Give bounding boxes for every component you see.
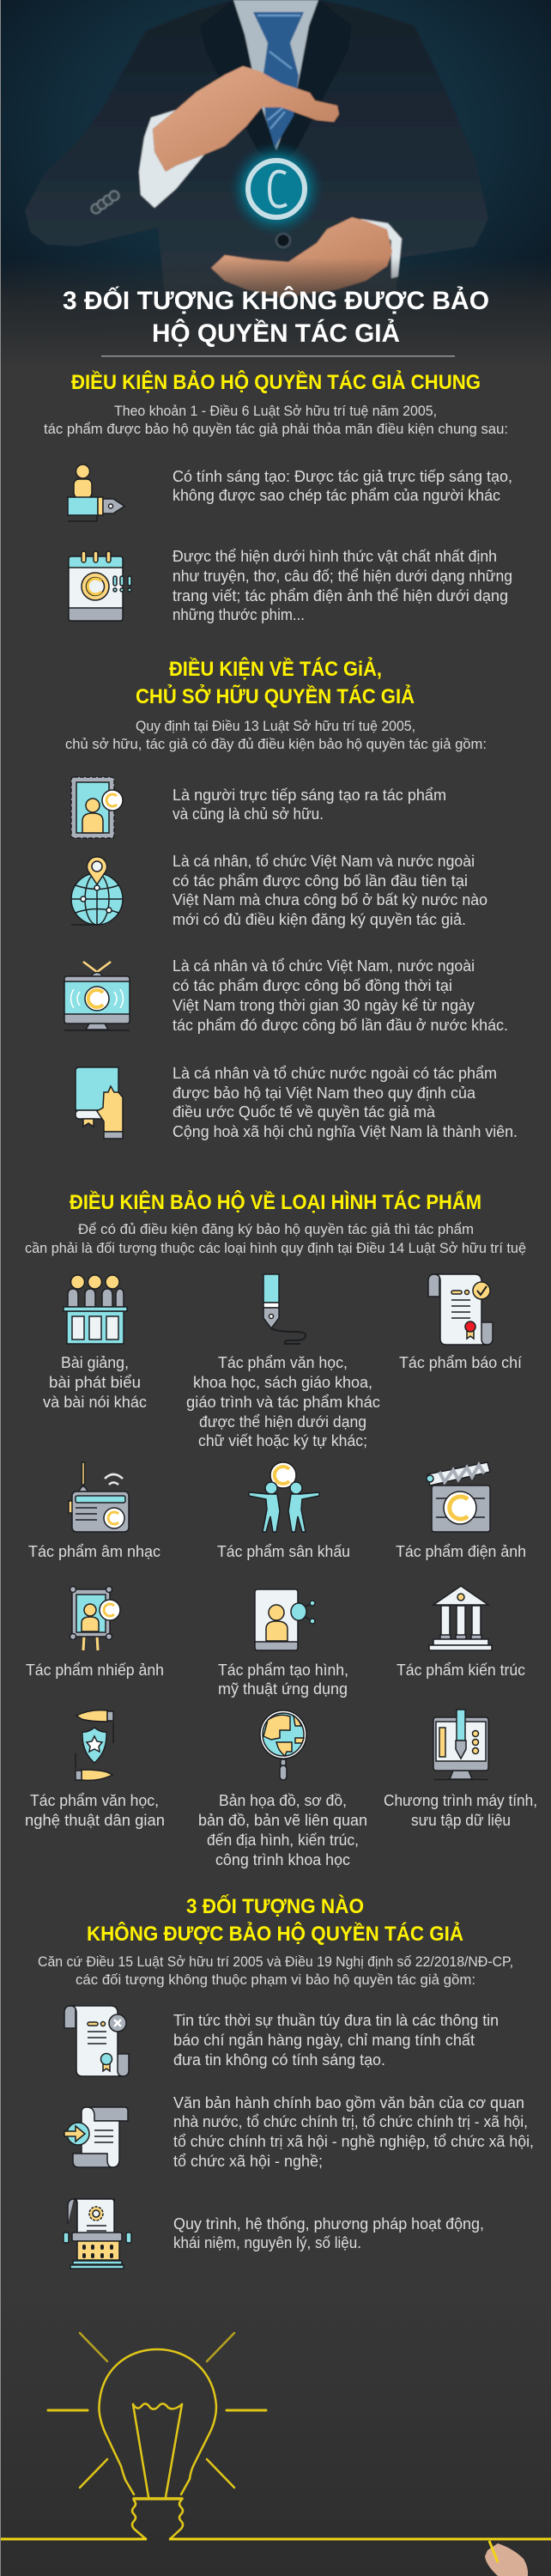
icon: magnifier with map <box>260 1710 306 1780</box>
title: HỘ QUYỀN TÁC GIẢ <box>152 319 400 348</box>
icon: typewriter with gear <box>64 2199 131 2269</box>
text: Vietnamese and foreign individuals first publication: có tác phẩm được công bố lần đầu tiên tại <box>173 872 468 890</box>
caption: computer programs <box>384 1792 537 1829</box>
caption: lectures <box>43 1354 147 1411</box>
text: international treaty: Là cá nhân và tổ chức nước ngoài có tác phẩm <box>173 1065 497 1082</box>
hand holding chalk <box>485 2541 528 2576</box>
caption: lectures: bài phát biểu <box>49 1374 141 1391</box>
heading: author conditions: ĐIỀU KIỆN VỀ TÁC GiẢ, <box>169 656 382 681</box>
caption: film works: Tác phẩm điện ảnh <box>396 1543 526 1560</box>
caption: literary and scientific works <box>186 1354 380 1449</box>
heading: author conditions <box>136 656 415 708</box>
heading: unprotected subjects <box>87 1894 463 1946</box>
text: physical form condition: Được thể hiện dưới hình thức vật chất nhất định <box>173 548 497 565</box>
caption: press works: Tác phẩm báo chí <box>399 1354 522 1371</box>
left edge strip <box>0 0 1 2576</box>
text: processes and concepts <box>173 2215 484 2251</box>
icon: scroll with arrow <box>64 2107 128 2167</box>
icon: press certificate <box>428 1274 493 1345</box>
text: physical form condition: những thước phim... <box>173 606 305 623</box>
caption: folk art <box>25 1792 165 1829</box>
text: creativity condition: Có tính sáng tạo: Được tác giả trực tiếp sáng tạo, <box>173 468 512 485</box>
text: simultaneous publication: Là cá nhân và tổ chức Việt Nam, nước ngoài <box>173 957 475 975</box>
intro text: unprotected subjects: các đối tượng không thuộc phạm vi bảo hộ quyền tác giả gồm: <box>76 1972 475 1988</box>
caption: literary and scientific works: Tác phẩm văn học, <box>218 1354 348 1371</box>
heading: author conditions: CHỦ SỞ HỮU QUYỀN TÁC GIẢ <box>136 683 415 708</box>
icon: photo on easel <box>70 1587 120 1650</box>
text: Vietnamese and foreign individuals first publication: Việt Nam mà chưa công bố ở bất kỳ nước nào <box>173 891 487 908</box>
hero photo: businessman protecting copyright symbol <box>0 0 551 369</box>
text: international treaty: được bảo hộ tại Việt Nam theo quy định của <box>173 1084 476 1102</box>
text: pure news: Tin tức thời sự thuần túy đưa tin là các thông tin <box>173 2012 499 2029</box>
text: administrative documents: tổ chức chính trị xã hội - nghề nghiệp, tổ chức xã hội, <box>173 2133 534 2150</box>
text: physical form condition: như truyện, thơ, câu đố; thể hiện dưới dạng những <box>173 568 512 585</box>
text: simultaneous publication <box>173 957 508 1034</box>
icon: hands protecting shield <box>76 1710 113 1780</box>
text: international treaty: điều ước Quốc tế về quyền tác giả mà <box>173 1103 436 1121</box>
icon: phone with person <box>255 1589 315 1650</box>
text: simultaneous publication: tác phẩm đó được công bố lần đầu ở nước khác. <box>173 1017 508 1034</box>
intro text: types of works: cần phải là đối tượng thuộc các loại hình quy định tại Điều 14 Luật Sở hữu trí tuệ <box>25 1241 526 1256</box>
text: pure news: đưa tin không có tính sáng tạo. <box>173 2051 385 2069</box>
icon: news document with x badge <box>64 2006 129 2076</box>
icon: fountain pen <box>263 1274 306 1344</box>
title <box>63 286 489 348</box>
heading: types of works: ĐIỀU KIỆN BẢO HỘ VỀ LOẠI HÌNH TÁC PHẨM <box>70 1189 481 1214</box>
caption: folk art: Tác phẩm văn học, <box>30 1792 159 1809</box>
chalk ground line <box>1 2538 551 2540</box>
intro text: general conditions: Theo khoản 1 - Điều 6 Luật Sở hữu trí tuệ năm 2005, <box>114 404 437 419</box>
text: simultaneous publication: Việt Nam trong thời gian 30 ngày kể từ ngày <box>173 997 475 1014</box>
text: direct creator: và cũng là chủ sở hữu. <box>173 805 324 823</box>
text: creativity condition <box>173 468 512 504</box>
caption: literary and scientific works: giáo trình và tác phẩm khác <box>186 1394 380 1411</box>
text: international treaty: Cộng hoà xã hội chủ nghĩa Việt Nam là thành viên. <box>173 1123 518 1140</box>
heading: general conditions: ĐIỀU KIỆN BẢO HỘ QUYỀN TÁC GIẢ CHUNG <box>71 369 481 394</box>
icon: classical building <box>429 1586 492 1650</box>
intro text: author conditions: Quy định tại Điều 13 Luật Sở hữu trí tuệ 2005, <box>136 719 415 734</box>
icon: notepad with copyright <box>69 551 131 621</box>
caption: architecture: Tác phẩm kiến trúc <box>397 1662 525 1679</box>
intro text: author conditions <box>65 719 487 752</box>
icon: globe with pin <box>71 857 123 925</box>
icon: film clapperboard <box>427 1462 490 1532</box>
icon: lecture podium <box>64 1275 127 1344</box>
caption: lectures: Bài giảng, <box>61 1354 129 1371</box>
text: physical form condition <box>173 548 512 623</box>
caption: folk art: nghệ thuật dân gian <box>25 1812 165 1829</box>
caption: computer programs: Chương trình máy tính, <box>384 1792 537 1809</box>
text: direct creator <box>173 787 446 823</box>
text: pure news: báo chí ngắn hàng ngày, chỉ mang tính chất <box>173 2031 475 2049</box>
text: simultaneous publication: có tác phẩm được công bố đồng thời tại <box>173 977 452 994</box>
caption: lectures: và bài nói khác <box>43 1394 147 1411</box>
intro text: unprotected subjects <box>38 1954 513 1988</box>
icon: person with pen <box>68 465 124 521</box>
icon: stamp with person <box>71 777 123 838</box>
caption: literary and scientific works: được thể hiện dưới dạng <box>199 1413 366 1431</box>
intro text: unprotected subjects: Căn cứ Điều 15 Luật Sở hữu trí 2005 và Điều 19 Nghị định số 22/2018/NĐ-CP, <box>38 1954 513 1970</box>
caption: stage works: Tác phẩm sân khấu <box>217 1543 350 1560</box>
text: creativity condition: không được sao chép tác phẩm của người khác <box>173 487 500 504</box>
caption: fine and applied art: Tác phẩm tạo hình, <box>218 1662 348 1679</box>
caption: computer programs: sưu tập dữ liệu <box>411 1812 511 1829</box>
caption: fine and applied art <box>218 1662 348 1698</box>
caption: photography works: Tác phẩm nhiếp ảnh <box>26 1662 164 1679</box>
caption: maps and drawings: công trình khoa học <box>215 1851 350 1868</box>
text: pure news <box>173 2012 499 2069</box>
text: Vietnamese and foreign individuals first publication: mới có đủ điều kiện đăng ký quyền tác giả. <box>173 911 466 928</box>
intro text: author conditions: chủ sở hữu, tác giả có đầy đủ điều kiện bảo hộ quyền tác giả gồm: <box>65 737 487 752</box>
text: international treaty <box>173 1065 518 1140</box>
heading: unprotected subjects: 3 ĐỐI TƯỢNG NÀO <box>186 1894 364 1918</box>
caption: maps and drawings <box>198 1792 367 1868</box>
intro text: general conditions: tác phẩm được bảo hộ quyền tác giả phải thỏa mãn điều kiện chung sau: <box>44 422 508 437</box>
icon: radio <box>69 1462 129 1532</box>
text: direct creator: Là người trực tiếp sáng tạo ra tác phẩm <box>173 787 446 804</box>
caption: literary and scientific works: chữ viết hoặc ký tự khác; <box>198 1432 367 1449</box>
intro text: types of works: Để có đủ điều kiện đăng ký bảo hộ quyền tác giả thì tác phẩm <box>78 1222 474 1237</box>
text: processes and concepts: khái niệm, nguyên lý, số liệu. <box>173 2234 361 2251</box>
text: physical form condition: trang viết; tác phẩm điện ảnh thể hiện dưới dạng <box>173 587 508 605</box>
caption: music works: Tác phẩm âm nhạc <box>28 1543 160 1560</box>
chalkboard background <box>1 2284 551 2576</box>
icon: stage performers <box>249 1462 319 1532</box>
text: administrative documents: tổ chức xã hội - nghề; <box>173 2153 323 2170</box>
caption: maps and drawings: Bản họa đồ, sơ đồ, <box>219 1792 347 1809</box>
intro text: types of works <box>25 1222 526 1256</box>
caption: literary and scientific works: khoa học, sách giáo khoa, <box>193 1374 372 1391</box>
intro text: general conditions <box>44 404 508 437</box>
text: processes and concepts: Quy trình, hệ thống, phương pháp hoạt động, <box>173 2215 484 2233</box>
title: 3 ĐỐI TƯỢNG KHÔNG ĐƯỢC BẢO <box>63 286 489 315</box>
icon: hand on book <box>76 1067 123 1139</box>
caption: fine and applied art: mỹ thuật ứng dụng <box>218 1680 348 1698</box>
icon: computer with pen tool <box>433 1710 488 1779</box>
text: administrative documents: nhà nước, tổ chức chính trị, tổ chức chính trị - xã hội, <box>173 2113 528 2130</box>
caption: maps and drawings: đến địa hình, kiến trúc, <box>207 1832 359 1849</box>
illustration: chalk light bulb <box>48 2312 266 2539</box>
heading: unprotected subjects: KHÔNG ĐƯỢC BẢO HỘ QUYỀN TÁC GIẢ <box>87 1921 463 1946</box>
text: administrative documents <box>173 2094 534 2170</box>
text: Vietnamese and foreign individuals first publication <box>173 853 487 928</box>
caption: maps and drawings: bản đồ, bản vẽ liên quan <box>198 1812 367 1829</box>
text: administrative documents: Văn bản hành chính bao gồm văn bản của cơ quan <box>173 2094 524 2111</box>
icon: television with copyright <box>64 962 130 1030</box>
text: Vietnamese and foreign individuals first publication: Là cá nhân, tổ chức Việt Nam và nước ngoài <box>173 853 475 870</box>
